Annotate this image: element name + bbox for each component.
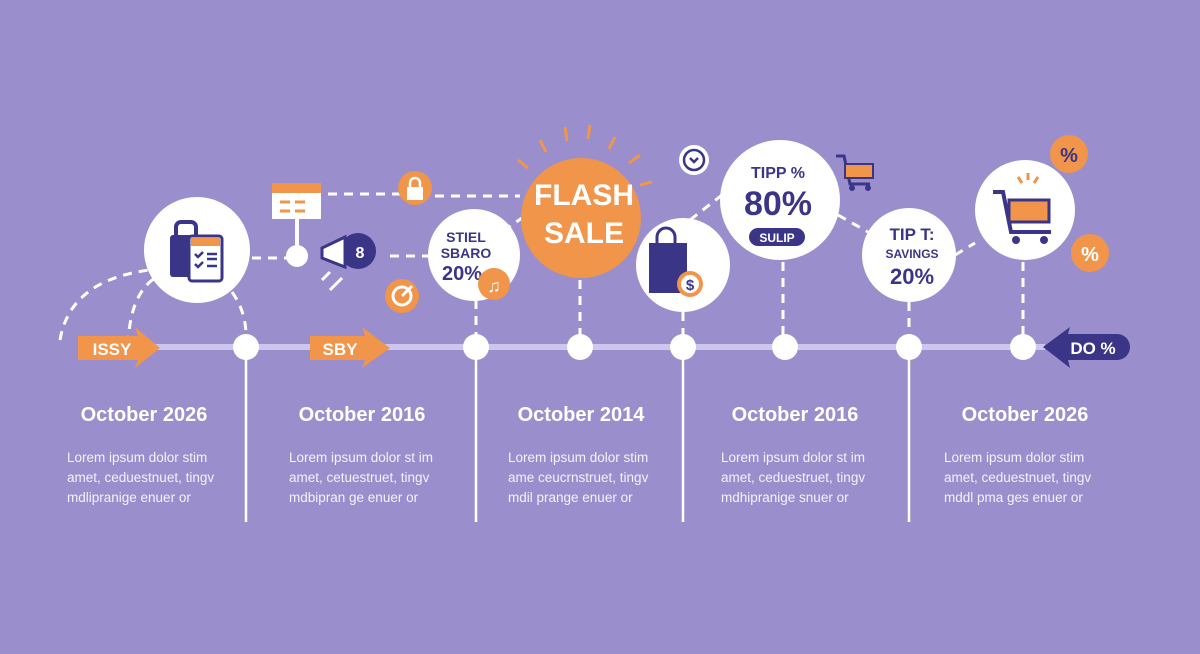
circle: STIEL SBARO 20% xyxy=(428,209,520,301)
icon: lock bubble xyxy=(398,171,432,205)
body text: mdlipranige enuer or xyxy=(67,490,191,505)
body text: Lorem ipsum dolor st im xyxy=(289,450,433,465)
icon: target xyxy=(385,279,419,313)
body text: Lorem ipsum dolor stim xyxy=(944,450,1084,465)
icon: megaphone: 8 xyxy=(356,245,365,262)
body text: amet, ceduestruet, tingv xyxy=(721,470,865,485)
badge: % right: % xyxy=(1081,244,1099,266)
circle: TIPP 80%: 80% xyxy=(744,185,812,223)
arrow: ISSY xyxy=(78,327,160,368)
flash sale badge: FLASH xyxy=(534,179,634,212)
body text: mdhipranige snuer or xyxy=(721,490,849,505)
body text: Lorem ipsum dolor stim xyxy=(67,450,207,465)
headings: October 2026 xyxy=(962,404,1088,426)
circle: checklist bag xyxy=(144,197,250,303)
circle: TIP savings 20%: 20% xyxy=(890,264,934,289)
headings: October 2014 xyxy=(518,404,645,426)
icon: small cart xyxy=(836,156,873,191)
arrow: DO % xyxy=(1043,327,1130,368)
circle: STIEL SBARO 20%: SBARO xyxy=(441,245,491,261)
circle: STIEL SBARO 20%: ♫ xyxy=(487,276,501,296)
body text: mddl pma ges enuer or xyxy=(944,490,1083,505)
icon: calendar card xyxy=(272,183,321,245)
arrow: SBY: SBY xyxy=(323,340,358,359)
arrow: DO %: DO % xyxy=(1070,339,1116,358)
badge: % top xyxy=(1050,135,1088,173)
circle: STIEL SBARO 20%: STIEL xyxy=(446,229,486,245)
circle: shopping bag dollar: $ xyxy=(686,277,695,294)
circle: TIPP 80%: TIPP % xyxy=(751,165,805,182)
circle: TIP savings 20%: TIP T: xyxy=(889,225,935,244)
headings xyxy=(81,404,1088,426)
badge: % right xyxy=(1071,234,1109,272)
icon: megaphone xyxy=(322,233,376,290)
body text: amet, ceduestnuet, tingv xyxy=(67,470,214,485)
timeline line xyxy=(155,344,1045,350)
icon: clock badge xyxy=(679,145,709,175)
circle: TIP savings 20%: SAVINGS xyxy=(885,247,939,261)
body text: mdbipran ge enuer or xyxy=(289,490,419,505)
circle: TIPP 80% xyxy=(720,140,840,260)
arrow: SBY xyxy=(310,327,390,368)
body text: Lorem ipsum dolor stim xyxy=(508,450,648,465)
circle: STIEL SBARO 20%: 20% xyxy=(442,263,482,285)
headings: October 2016 xyxy=(299,404,425,426)
circle: cart xyxy=(975,160,1075,260)
body text: mdil prange enuer or xyxy=(508,490,633,505)
flash sale badge xyxy=(518,125,652,278)
arrow: ISSY: ISSY xyxy=(93,340,132,359)
badge: % top: % xyxy=(1060,145,1078,167)
circle: shopping bag dollar xyxy=(636,218,730,312)
circle: TIP savings 20% xyxy=(862,208,956,302)
body text: amet, ceduestnuet, tingv xyxy=(944,470,1091,485)
headings: October 2016 xyxy=(732,404,858,426)
body text xyxy=(67,450,1091,505)
timeline nodes xyxy=(233,245,1036,360)
headings: October 2026 xyxy=(81,404,207,426)
body text: Lorem ipsum dolor st im xyxy=(721,450,865,465)
flash sale badge: SALE xyxy=(544,217,624,250)
body text: ame ceucrnstruet, tingv xyxy=(508,470,649,485)
body text: amet, cetuestruet, tingv xyxy=(289,470,430,485)
circle: TIPP 80%: SULIP xyxy=(759,231,795,245)
